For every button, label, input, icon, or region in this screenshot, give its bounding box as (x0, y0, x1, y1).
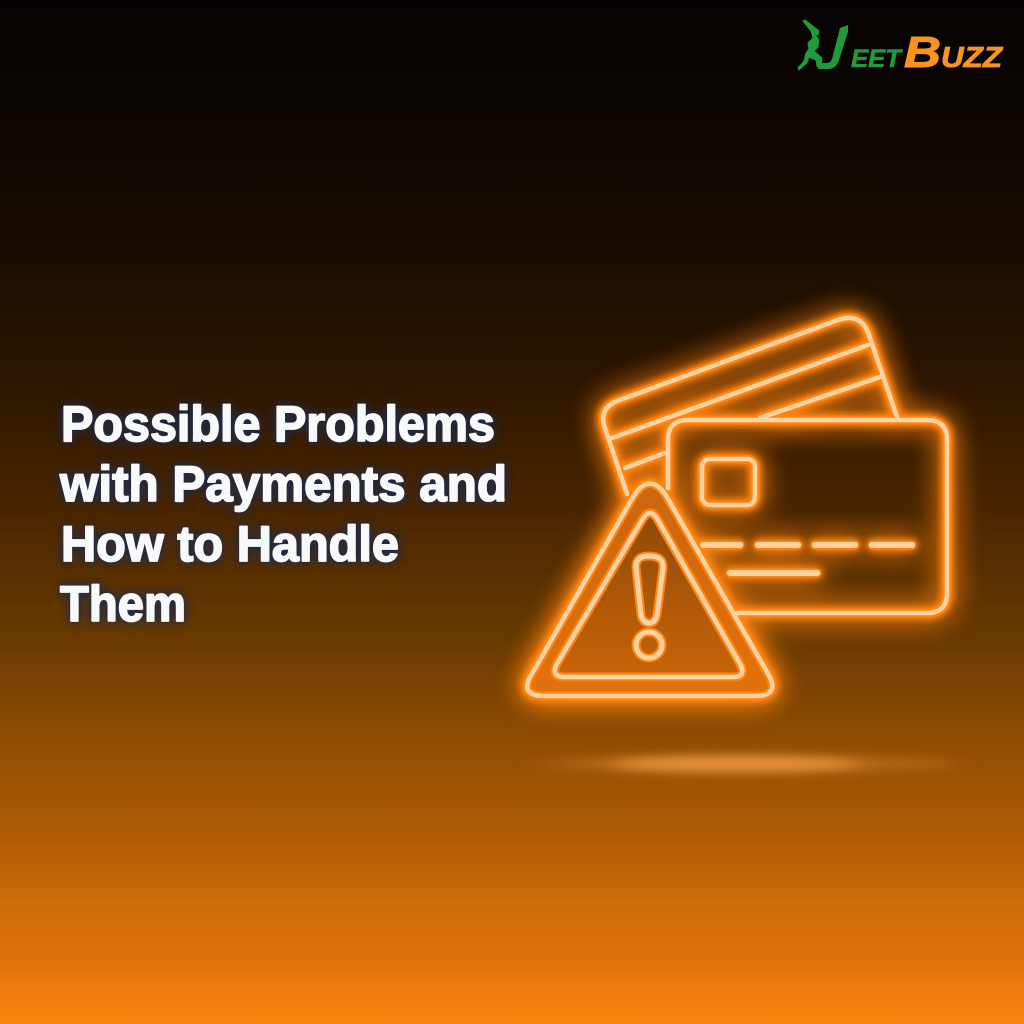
logo wordmark green: EET (851, 45, 904, 73)
card chip (702, 459, 755, 505)
card number dashes (703, 545, 912, 573)
logo: JeetBuzz (798, 20, 1003, 77)
front credit card outline (668, 420, 947, 613)
logo wordmark orange UZZ: UZZ (941, 42, 1003, 74)
icon: credit cards with warning triangle (527, 318, 947, 696)
title (59, 396, 507, 632)
title: with Payments and (59, 456, 507, 512)
logo icon: cricket player (798, 20, 822, 70)
back credit card outline (603, 318, 897, 494)
title: Them (60, 576, 186, 632)
floor glow under the icon (545, 755, 955, 773)
title: Possible Problems (61, 396, 495, 452)
logo wordmark orange B: B (904, 28, 941, 77)
logo letter J (818, 25, 848, 69)
warning triangle (527, 484, 772, 696)
neon glow layer (527, 318, 947, 696)
exclamation mark (636, 556, 663, 658)
title: How to Handle (61, 516, 399, 572)
